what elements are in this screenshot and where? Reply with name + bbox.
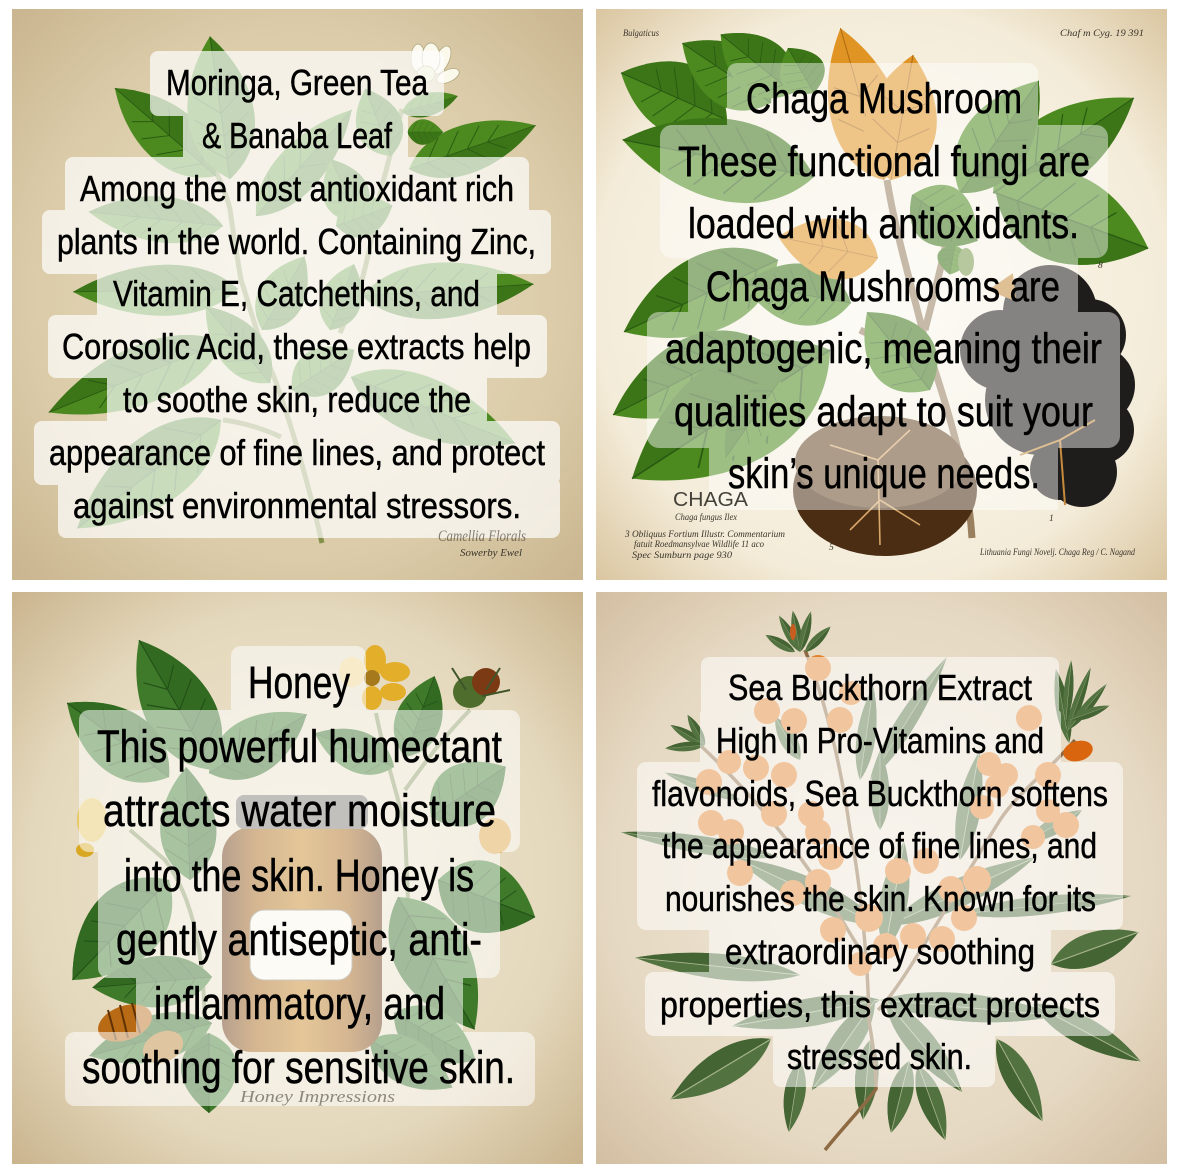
text block: chaga description: qualities adapt to suit your bbox=[674, 388, 1093, 436]
panel: chaga mushroom bbox=[596, 9, 1167, 580]
orange berries bbox=[696, 655, 1079, 976]
plate caption: fatuit Roedmansylvae Wildlife 11 aco bbox=[634, 539, 764, 550]
text block: moringa description: Among the most antioxidant rich bbox=[80, 168, 514, 209]
text block: moringa description: Corosolic Acid, these extracts help bbox=[62, 326, 531, 367]
text block: chaga description bbox=[665, 75, 1102, 498]
icon: honey jar bbox=[222, 795, 382, 1052]
plate caption: Spec Sumburn page 930 bbox=[632, 551, 732, 561]
illustration: sea buckthorn branch bbox=[620, 610, 1147, 1150]
plate caption: Chaga fungus Ilex bbox=[675, 512, 738, 523]
highlight boxes behind text bbox=[647, 63, 1120, 510]
panel: sea buckthorn extract bbox=[596, 592, 1167, 1164]
panel 2 parchment background bbox=[596, 9, 1167, 580]
text block: honey description: soothing for sensitive skin. bbox=[82, 1042, 515, 1093]
icon: yellow flower bbox=[339, 645, 410, 710]
small green bud bbox=[958, 248, 974, 276]
signature: Honey Impressions bbox=[239, 1087, 395, 1106]
plate caption: Chaf m Cyg. 19 391 bbox=[1060, 28, 1144, 39]
text block: honey description: Honey bbox=[248, 657, 350, 708]
plate caption: 1 bbox=[1049, 514, 1054, 524]
icon: left side blossom bbox=[76, 798, 107, 857]
text block: moringa description: plants in the world. Containing Zinc, bbox=[57, 221, 536, 262]
branch bbox=[700, 650, 1075, 1150]
brown chaga fungus bbox=[793, 416, 977, 556]
text block: sea buckthorn description: the appearance of fine lines, and bbox=[662, 825, 1097, 866]
text block: moringa description: against environmental stressors. bbox=[73, 485, 521, 526]
text block: sea buckthorn description: nourishes the skin. Known for its bbox=[665, 878, 1096, 919]
text block: sea buckthorn description bbox=[652, 667, 1108, 1077]
illustration: moringa branch bbox=[38, 32, 544, 556]
text block: sea buckthorn description: properties, this extract protects bbox=[660, 984, 1100, 1025]
panel 1 parchment background bbox=[12, 9, 583, 580]
text block: honey description: attracts water moisture bbox=[103, 785, 496, 836]
panel: honey bbox=[12, 592, 583, 1164]
text block: chaga description: Chaga Mushroom bbox=[746, 75, 1022, 123]
plate caption bbox=[623, 28, 1144, 561]
text block: moringa description: appearance of fine lines, and protect bbox=[49, 432, 545, 473]
highlight boxes behind text bbox=[65, 646, 535, 1106]
text block: moringa description bbox=[49, 62, 545, 526]
text block: sea buckthorn description: stressed skin. bbox=[787, 1036, 972, 1077]
text block: honey description: gently antiseptic, anti- bbox=[116, 914, 482, 965]
black mushroom cluster bbox=[960, 265, 1135, 507]
sprig: top bbox=[763, 610, 834, 656]
text block: chaga description: skin’s unique needs. bbox=[728, 450, 1040, 498]
plate caption: 3 Obliquus Fortium Illustr. Commentarium bbox=[624, 530, 785, 540]
text block: sea buckthorn description: extraordinary soothing bbox=[725, 931, 1035, 972]
text block: moringa description: Moringa, Green Tea bbox=[166, 62, 429, 103]
text block: moringa description: & Banaba Leaf bbox=[202, 115, 393, 156]
text block: honey description bbox=[82, 657, 515, 1093]
plate caption: Lithuania Fungi Novelj. Chaga Reg / C. Nagand bbox=[979, 548, 1135, 558]
plate caption: 5 bbox=[829, 543, 834, 553]
text block: chaga description: adaptogenic, meaning their bbox=[665, 325, 1102, 373]
faded signature: Camellia Florals bbox=[438, 528, 526, 545]
single orange berry bbox=[1061, 737, 1095, 765]
illustration: chaga branch and fungi bbox=[597, 13, 1164, 556]
signature line two: Sowerby Ewel bbox=[460, 547, 522, 559]
text block: honey description: This powerful humectant bbox=[97, 721, 502, 772]
tan patch and veins bbox=[990, 275, 1095, 505]
plate label: CHAGA: CHAGA bbox=[673, 489, 749, 511]
text block: moringa description: to soothe skin, reduce the bbox=[123, 379, 471, 420]
text block: moringa description: Vitamin E, Catchethins, and bbox=[113, 273, 480, 314]
text block: chaga description: Chaga Mushrooms are bbox=[706, 263, 1060, 311]
panel: moringa, green tea and banaba leaf bbox=[12, 9, 583, 580]
icon: white tea flower bbox=[411, 43, 461, 87]
highlight boxes behind text bbox=[34, 51, 560, 538]
text block: sea buckthorn description: High in Pro-Vitamins and bbox=[716, 720, 1044, 761]
panel 3 parchment background bbox=[12, 592, 583, 1164]
text block: honey description: inflammatory, and bbox=[154, 978, 445, 1029]
plate caption: 8 bbox=[1098, 261, 1103, 271]
panel 4 parchment background bbox=[596, 592, 1167, 1164]
sprig: left bbox=[665, 712, 709, 753]
text block: chaga description: loaded with antioxidants. bbox=[688, 200, 1079, 248]
illustration: honey jar and botanicals bbox=[46, 623, 548, 1113]
text block: sea buckthorn description: Sea Buckthorn Extract bbox=[728, 667, 1032, 708]
text block: chaga description: These functional fungi are bbox=[678, 138, 1090, 186]
highlight boxes behind text bbox=[637, 657, 1123, 1087]
icon: flower bud bbox=[452, 668, 510, 708]
plate caption: Bulgaticus bbox=[623, 29, 659, 39]
icon: right side blossom bbox=[479, 818, 511, 854]
sprig: right bbox=[1061, 660, 1111, 737]
text block: honey description: into the skin. Honey is bbox=[124, 850, 474, 901]
icon: honey bee pupa bbox=[93, 997, 188, 1069]
